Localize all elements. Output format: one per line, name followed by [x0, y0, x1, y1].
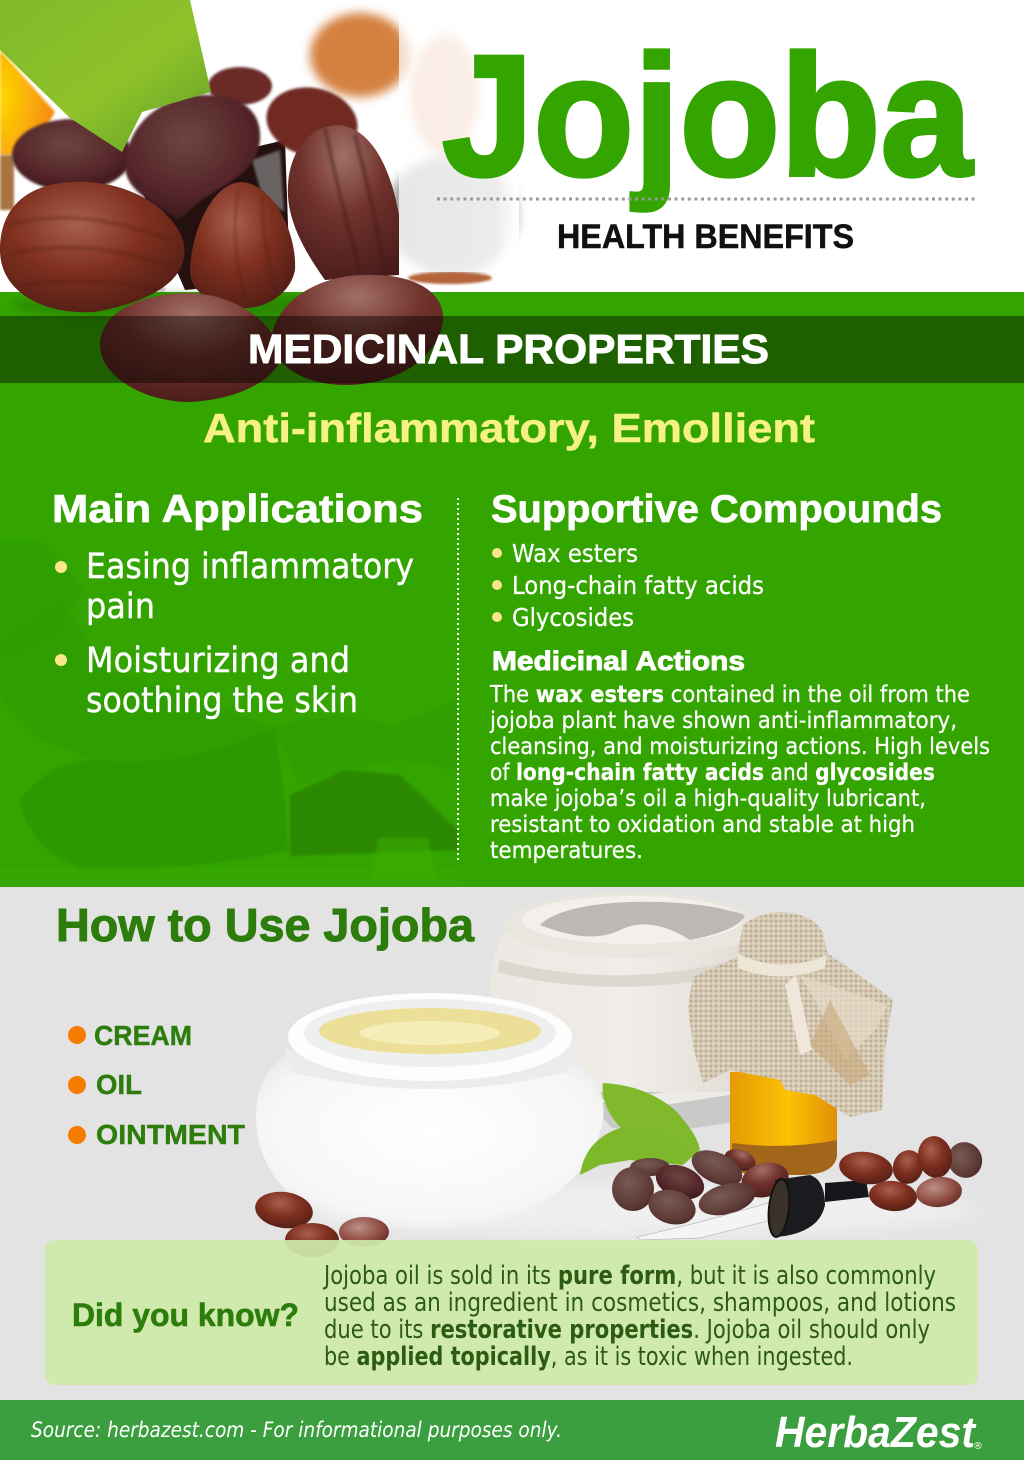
dropper: [637, 1175, 869, 1240]
did you know text: due to its restorative properties. Jojoba oil should only: [324, 1315, 930, 1345]
subtitle: HEALTH BENEFITS: [557, 218, 854, 256]
bullet item 1: [55, 547, 414, 627]
image: cream jars, oil bottle and seeds: [253, 892, 988, 1257]
panel: main applications: [52, 488, 423, 721]
compounds list: Glycosides: [512, 603, 634, 632]
medicinal actions paragraph: [489, 682, 990, 864]
source note: Source: herbazest.com - For informational purposes only.: [31, 1418, 562, 1442]
leaves: [580, 1083, 700, 1175]
medicinal actions paragraph: of long-chain fatty acids and glycosides: [490, 760, 935, 786]
seeds on the right: [837, 1133, 988, 1213]
bullet item 2: Moisturizing and: [86, 641, 350, 681]
compounds list: Wax esters: [512, 539, 638, 568]
compounds list: [492, 539, 764, 632]
panel: medicinal properties green background: [0, 292, 1024, 887]
bullet item 1: pain: [86, 587, 155, 627]
panel: how to use background: [0, 887, 1024, 1400]
panel: supportive compounds: [489, 488, 990, 864]
bullet item 2: [55, 641, 358, 721]
section banner: [0, 316, 1024, 383]
medicinal actions paragraph: jojoba plant have shown anti-inflammatory,: [489, 708, 957, 734]
did you know text: be applied topically, as it is toxic when ingested.: [324, 1342, 853, 1372]
oil bottle: [730, 1072, 837, 1175]
shadow under products: [300, 1184, 980, 1236]
how to use heading: How to Use Jojoba: [56, 899, 474, 951]
list: forms of use: OIL: [96, 1069, 142, 1100]
medicinal actions paragraph: make jojoba’s oil a high-quality lubricant,: [490, 786, 926, 812]
title: Jojoba: [442, 20, 973, 212]
image: jojoba seeds pile: [0, 67, 443, 402]
did you know text: Jojoba oil is sold in its pure form, but it is also commonly: [322, 1261, 936, 1291]
seeds beside bottle: [612, 1143, 793, 1230]
list: forms of use: CREAM: [94, 1020, 192, 1051]
heading: Main Applications: [52, 488, 423, 531]
column divider: [457, 498, 459, 862]
list: forms of use: OINTMENT: [96, 1119, 245, 1150]
bullet item 2: soothing the skin: [86, 681, 358, 721]
bullet item 1: Easing inflammatory: [86, 547, 414, 587]
list: forms of use: [68, 1020, 245, 1150]
seeds on the left: [253, 1188, 389, 1257]
image: blurred background seeds: [0, 13, 518, 284]
medicinal actions paragraph: temperatures.: [490, 838, 643, 864]
banner heading: MEDICINAL PROPERTIES: [248, 326, 769, 372]
burlap cover: [688, 912, 893, 1117]
heading: Supportive Compounds: [491, 488, 942, 531]
dotted divider under title: [437, 198, 975, 200]
image: green leaf: [0, 0, 211, 152]
brand logo: HerbaZest: [775, 1408, 977, 1457]
did you know label: Did you know?: [72, 1297, 299, 1333]
translucent white title box: [399, 16, 519, 272]
compounds list: Long-chain fatty acids: [512, 571, 764, 600]
footer: [0, 1400, 1024, 1460]
medicinal actions paragraph: resistant to oxidation and stable at high: [490, 812, 915, 838]
white jar: [256, 993, 604, 1229]
registered mark: ®: [973, 1441, 983, 1452]
image: green-tinted person applying cream: [0, 540, 458, 887]
back jar of white cream: [490, 892, 770, 1130]
medicinal actions heading: Medicinal Actions: [492, 646, 745, 676]
panel: did you know: [45, 1240, 978, 1385]
did you know text: [322, 1261, 956, 1372]
properties subheading: Anti-inflammatory, Emollient: [203, 405, 815, 451]
medicinal actions paragraph: cleansing, and moisturizing actions. High levels: [490, 734, 990, 760]
medicinal actions paragraph: The wax esters contained in the oil from the: [489, 682, 970, 708]
